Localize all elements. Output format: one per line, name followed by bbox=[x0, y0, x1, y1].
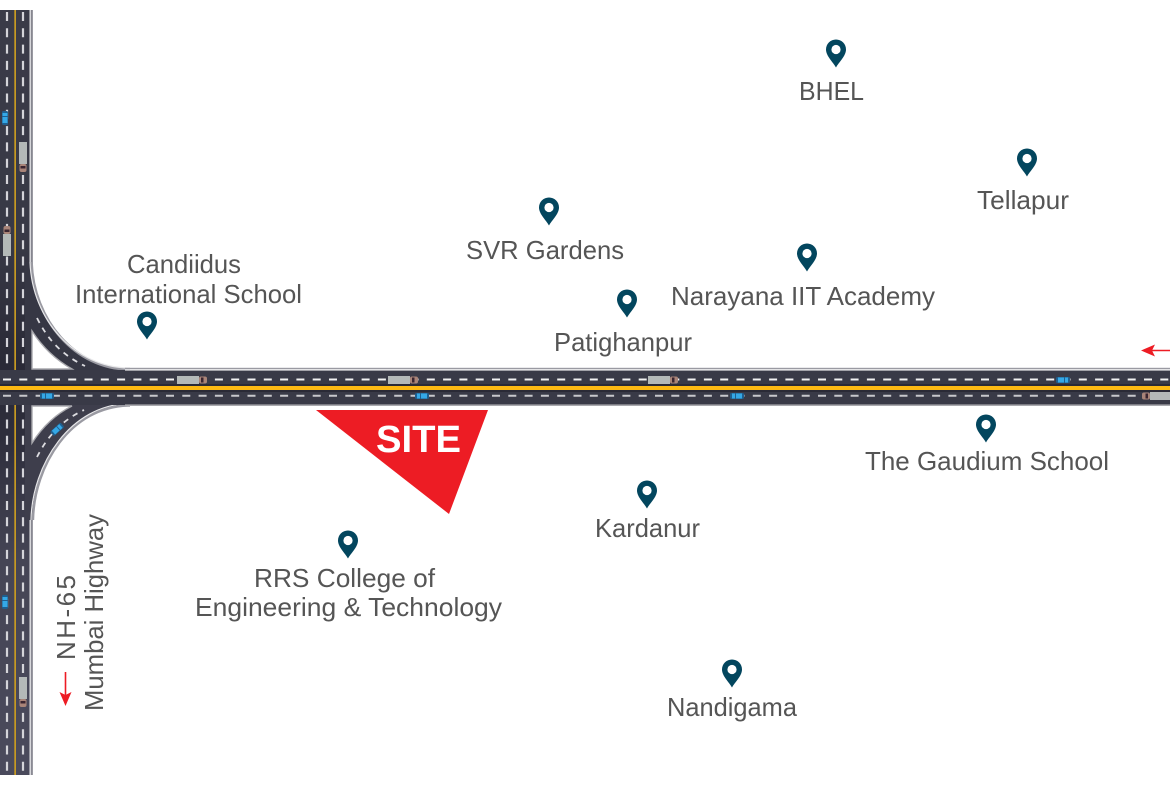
road: lower curved ramp bbox=[25, 402, 130, 520]
truck southbound bbox=[19, 142, 27, 172]
landmark: The Gaudium School bbox=[865, 414, 1109, 476]
arrow: south bbox=[60, 672, 72, 706]
car bbox=[40, 393, 54, 399]
truck northbound bbox=[3, 226, 11, 256]
landmark: Narayana IIT Academy bbox=[671, 244, 935, 311]
landmark: Candiidus International School bbox=[75, 249, 302, 340]
car bbox=[415, 393, 429, 399]
landmark: BHEL bbox=[799, 40, 864, 106]
landmark: Kardanur: Kardanur bbox=[595, 513, 700, 543]
Mumbai Highway text: Mumbai Highway bbox=[79, 514, 109, 711]
landmark: SVR Gardens bbox=[466, 198, 624, 265]
landmark: RRS College of Engineering & Technology bbox=[195, 530, 502, 622]
truck bbox=[177, 376, 207, 384]
landmark: Narayana IIT Academy: Narayana IIT Academy bbox=[671, 281, 935, 311]
truck bbox=[388, 376, 418, 384]
car on ramp bbox=[50, 422, 64, 436]
site label: SITE bbox=[376, 419, 461, 461]
truck facing west bbox=[1142, 392, 1170, 400]
car bbox=[2, 111, 8, 125]
road: horizontal highway bbox=[0, 368, 1170, 406]
car bbox=[1056, 377, 1070, 383]
highway label: NH-65 Mumbai Highway bbox=[51, 514, 109, 711]
truck bbox=[648, 376, 678, 384]
landmark: Patighanpur bbox=[554, 290, 692, 357]
landmark: RRS College of Engineering & Technology: Engineering & Technology bbox=[195, 592, 502, 622]
landmark: Kardanur bbox=[595, 480, 700, 543]
car bbox=[2, 595, 8, 609]
vehicles bbox=[2, 111, 1170, 707]
landmark: Tellapur: Tellapur bbox=[977, 185, 1069, 215]
landmark: SVR Gardens: SVR Gardens bbox=[466, 235, 624, 265]
car bbox=[730, 393, 744, 399]
landmark: BHEL: BHEL bbox=[799, 76, 864, 106]
landmark: The Gaudium School: The Gaudium School bbox=[865, 446, 1109, 476]
road: upper curved ramp bbox=[25, 262, 130, 372]
landmark: Nandigama bbox=[667, 660, 798, 722]
landmark: Candiidus International School: International School bbox=[75, 279, 302, 309]
arrow: west bbox=[1141, 344, 1170, 356]
landmark: Tellapur bbox=[977, 148, 1069, 215]
truck southbound bbox=[19, 677, 27, 707]
red site triangle bbox=[316, 410, 488, 514]
landmark: RRS College of Engineering & Technology: RRS College of bbox=[254, 563, 436, 593]
site marker bbox=[316, 410, 488, 514]
landmark: Nandigama: Nandigama bbox=[667, 692, 798, 722]
landmark: Candiidus International School: Candiidus bbox=[127, 249, 241, 279]
road: NH-65 vertical highway bbox=[0, 10, 33, 775]
landmark: Patighanpur: Patighanpur bbox=[554, 327, 692, 357]
NH-65 text: NH-65 bbox=[51, 575, 81, 660]
